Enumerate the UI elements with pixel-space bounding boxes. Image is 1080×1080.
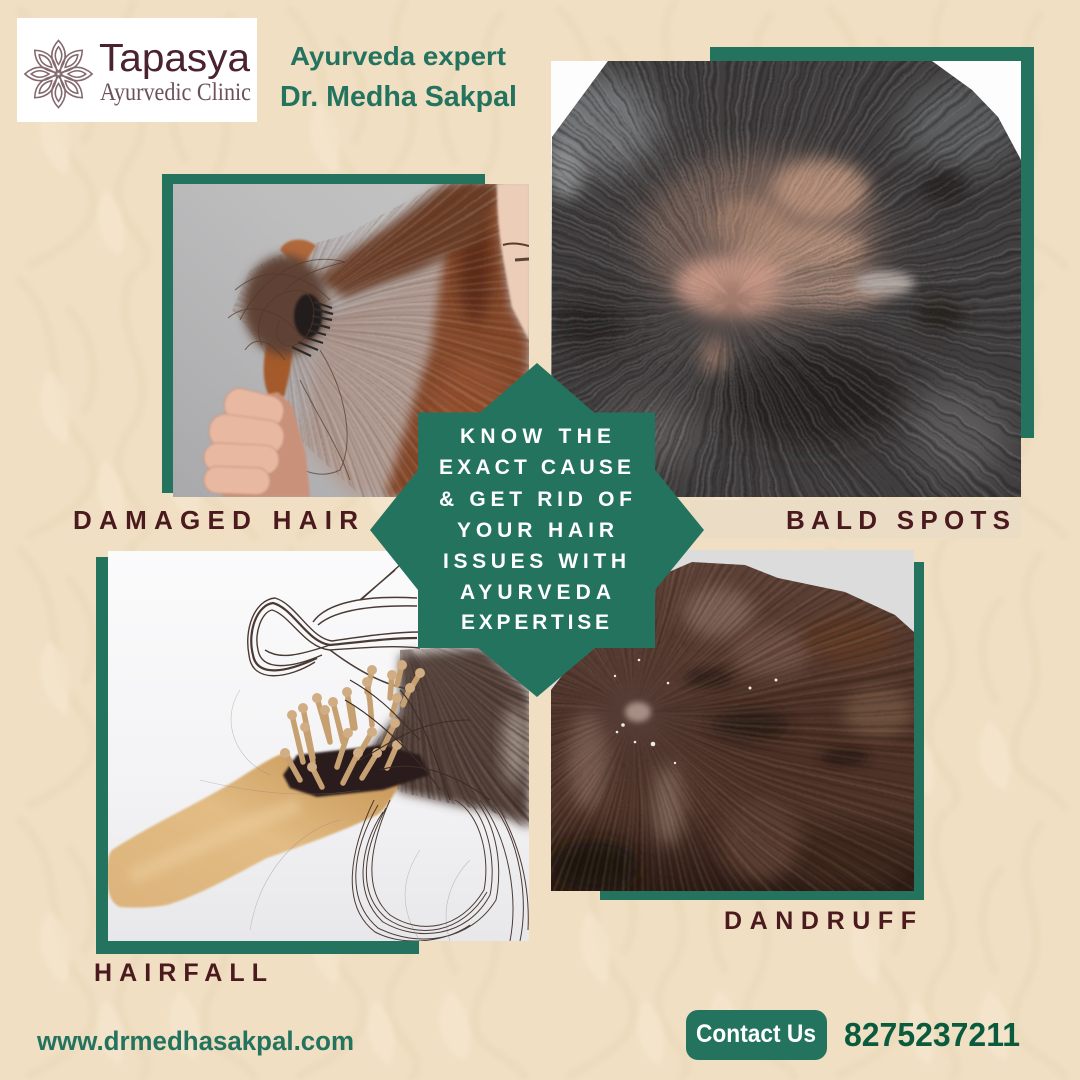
badge text: EXPERTISE (461, 611, 609, 634)
sheaf from crown to brush (315, 184, 498, 298)
hand (222, 392, 310, 497)
badge text: YOUR HAIR (457, 519, 614, 542)
photo: thinning crown (551, 61, 1021, 497)
dandruff flakes (614, 659, 778, 764)
logo subtitle: Ayurvedic Clinic (100, 79, 251, 106)
brush handle (264, 340, 292, 397)
brush bristles (292, 302, 333, 356)
badge text: KNOW THE (460, 425, 611, 448)
loose strands (248, 565, 528, 941)
phone number: 8275237211 (844, 1016, 1020, 1053)
logo wordmark: Tapasya (99, 37, 250, 80)
hair mass (367, 648, 530, 828)
handle (107, 752, 402, 908)
hair tangle (243, 255, 327, 355)
badge text: EXACT CAUSE (439, 456, 631, 479)
translucent strands (300, 255, 445, 497)
contact button (686, 1010, 827, 1060)
brush head (283, 745, 430, 797)
frame (710, 47, 1034, 438)
contact button: Contact Us (696, 1020, 816, 1048)
logo card (17, 18, 257, 122)
badge text: & GET RID OF (439, 488, 632, 511)
website: www.drmedhasakpal.com (36, 1026, 354, 1056)
photo: wooden brush with shed hair (107, 520, 530, 941)
panel: bald spots (551, 47, 1034, 538)
photo: scalp with flakes (551, 550, 914, 891)
label strip (690, 500, 1021, 538)
panel: hairfall (96, 520, 530, 954)
frame (96, 557, 419, 954)
heading: expert name: Dr. Medha Sakpal (280, 81, 517, 113)
heading: expert name: Ayurveda expert (290, 41, 506, 71)
icon: lotus mandala (25, 40, 92, 108)
label: dandruff: DANDRUFF (724, 907, 916, 935)
panel: dandruff (551, 550, 924, 900)
label: bald spots: BALD SPOTS (786, 505, 1010, 535)
centre badge (370, 363, 704, 697)
label: damaged hair: DAMAGED HAIR (73, 505, 358, 535)
frame (600, 562, 924, 900)
strands over bristles (345, 680, 490, 800)
panel: damaged hair (162, 174, 529, 497)
eight-point star (370, 363, 704, 697)
badge text: AYURVEDA (460, 581, 611, 604)
photo: hair and brush (173, 184, 529, 497)
bristles (285, 665, 420, 787)
heading: expert name (280, 41, 517, 113)
badge text (439, 425, 632, 634)
right hair mass (385, 184, 529, 497)
face (497, 184, 529, 340)
label: hairfall: HAIRFALL (94, 959, 267, 987)
frame (162, 174, 485, 493)
badge text: ISSUES WITH (443, 550, 626, 573)
